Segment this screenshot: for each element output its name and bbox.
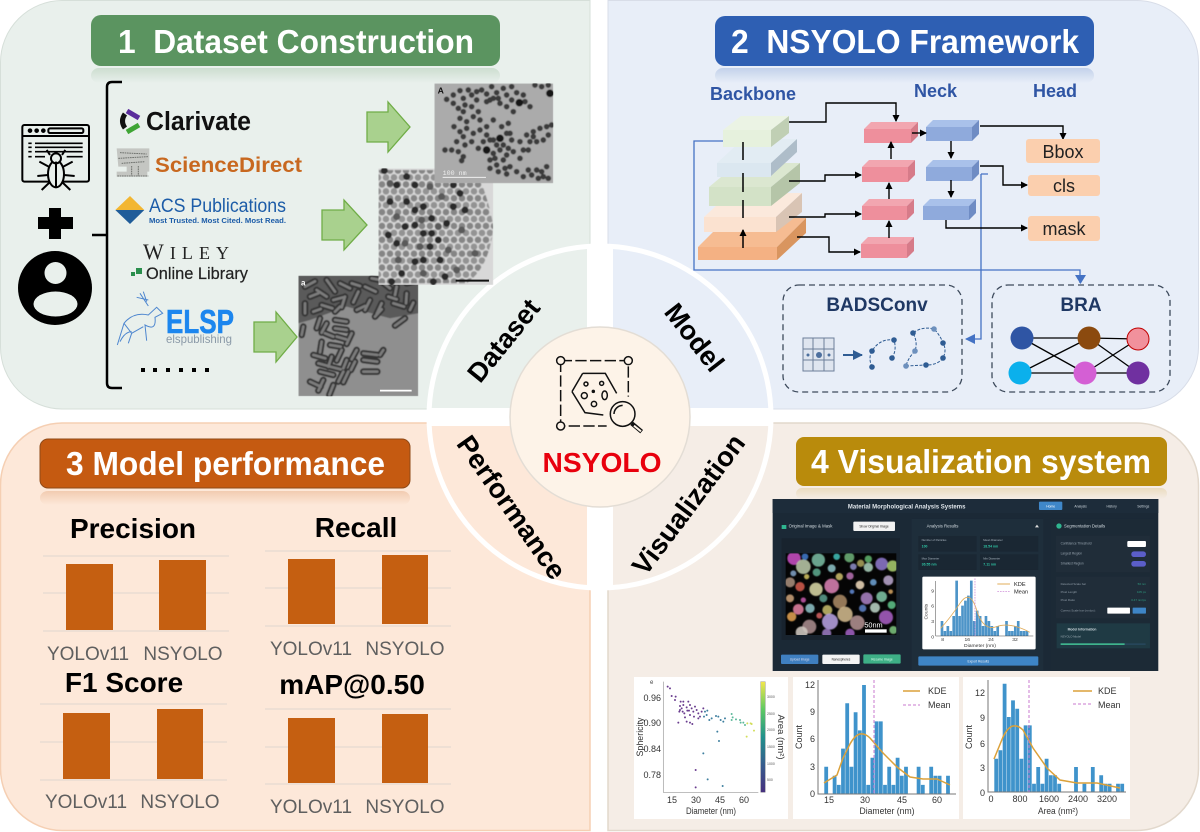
histogram: area: 2400 <box>1068 794 1088 804</box>
scatter plot: sphericity vs diameter: Sphericity <box>635 717 645 756</box>
dashboard screenshot: Material Morphological Analysis Systems <box>848 504 966 510</box>
central cross gap <box>432 248 768 586</box>
dashboard screenshot: Upload Image <box>790 658 810 662</box>
bracket <box>92 82 122 388</box>
histogram: diameter: 45 <box>897 795 907 805</box>
histogram: diameter: 60 <box>932 795 942 805</box>
dashboard screenshot: 105 px <box>1137 590 1146 594</box>
dashboard screenshot: Segmentation Details <box>1064 524 1105 529</box>
scatter plot: sphericity vs diameter: e <box>650 680 654 686</box>
dashboard screenshot: Pixel Ratio <box>1061 598 1075 602</box>
bar chart: Precision: YOLOv11 <box>47 644 129 665</box>
histogram: area: KDE <box>1098 686 1117 696</box>
scatter plot: sphericity vs diameter <box>634 677 788 819</box>
scatter plot: sphericity vs diameter: 2000 <box>767 728 775 732</box>
dashboard screenshot: 24 <box>988 637 994 643</box>
logo: ACS Publications: ACS Publications <box>149 196 286 217</box>
histogram: diameter: 30 <box>860 795 870 805</box>
dashboard screenshot: History <box>1106 504 1117 508</box>
dashboard screenshot: 16 <box>965 637 970 643</box>
panel: dataset background <box>0 0 590 409</box>
logo: ScienceDirect: ScienceDirect <box>155 153 302 177</box>
ring label: Visualization: Visualization <box>626 428 751 581</box>
bar chart: F1 Score <box>40 667 227 813</box>
histogram: area: 800 <box>1012 794 1028 804</box>
dashboard screenshot: 0 <box>931 634 934 640</box>
histogram: area: 3 <box>980 763 985 773</box>
histogram: diameter: 6 <box>810 734 815 744</box>
scatter plot: sphericity vs diameter: Diameter (nm) <box>686 806 736 816</box>
dashboard screenshot: Smallest Region <box>1061 561 1084 565</box>
histogram: area: 0 <box>988 794 994 804</box>
heading: visualization system: 4 Visualization system <box>811 443 1151 480</box>
dashboard screenshot: Model Information <box>1068 628 1096 632</box>
micrograph: nanoparticle chains: 100 nm <box>443 169 467 177</box>
dashboard screenshot: 18.54 nm <box>983 544 998 548</box>
neck blocks: red <box>861 122 918 258</box>
icon: plus <box>38 208 73 239</box>
scatter plot: sphericity vs diameter: 3000 <box>767 695 775 699</box>
module: BRA: BRA <box>1060 295 1102 316</box>
scatter plot: sphericity vs diameter: 15 <box>667 795 677 805</box>
dashboard screenshot: Nanospheres <box>832 658 851 662</box>
icon: detection box with magnifier <box>557 357 642 432</box>
heading: visualization system <box>796 437 1167 499</box>
panel: model performance <box>40 439 451 818</box>
logo: ScienceDirect <box>117 148 302 177</box>
panel: performance background <box>0 423 590 830</box>
logo: ELSP: ELSP <box>166 303 234 340</box>
histogram: area: Mean <box>1098 700 1121 710</box>
dashboard screenshot: Max Diameter <box>922 557 939 561</box>
head box: mask: mask <box>1042 219 1086 239</box>
bar chart: Recall <box>265 512 451 660</box>
bar chart: Recall: Recall <box>315 512 397 543</box>
histogram: diameter: Mean <box>928 700 951 710</box>
panel: visualization system <box>634 437 1167 819</box>
dashboard screenshot: Number of Particles <box>922 538 947 542</box>
dashboard screenshot: Confidence Threshold <box>1061 542 1092 546</box>
head box: mask <box>1028 216 1100 241</box>
bar chart: Recall: YOLOv11 <box>270 639 352 660</box>
histogram: area: 3200 <box>1097 794 1117 804</box>
heading: dataset construction: 1 Dataset Construction <box>118 23 474 60</box>
connectors: black arrows <box>789 103 1063 252</box>
bar chart: Precision <box>43 513 229 665</box>
module: BADSConv: BADSConv <box>826 295 928 316</box>
dashboard screenshot: Analysis Results <box>927 524 958 529</box>
histogram: area: 0 <box>980 788 985 798</box>
bar chart: Precision: Precision <box>70 513 196 544</box>
arrow: middle micrograph <box>322 200 367 250</box>
central ring <box>429 246 771 588</box>
dashboard screenshot <box>773 499 1158 671</box>
heading: model performance: 3 Model performance <box>66 445 385 482</box>
scatter plot: sphericity vs diameter: 500 <box>767 778 773 782</box>
arrow: bottom micrograph <box>254 312 297 362</box>
micrograph: nanorods: a <box>301 278 306 287</box>
panel: NSYOLO framework <box>694 16 1170 392</box>
histogram: area: 1600 <box>1039 794 1059 804</box>
label: Head: Head <box>1033 81 1077 101</box>
dashboard screenshot: Resume Image <box>871 657 893 661</box>
scatter plot: sphericity vs diameter: 30 <box>691 795 701 805</box>
module: BADSConv <box>783 285 962 392</box>
ring label: Dataset: Dataset <box>461 293 546 388</box>
logo: Clarivate: Clarivate <box>146 108 251 136</box>
heading: NSYOLO framework: 2 NSYOLO Framework <box>731 23 1080 60</box>
histogram: area: 12 <box>975 688 985 698</box>
logo: ACS Publications <box>115 196 286 225</box>
histogram: area: Count <box>964 724 974 749</box>
scatter plot: sphericity vs diameter: Area (nm²) <box>776 714 786 760</box>
heading: NSYOLO framework <box>715 16 1094 83</box>
dashboard screenshot: Analysis <box>1074 504 1087 508</box>
bar chart: F1 Score: YOLOv11 <box>45 792 127 813</box>
ring label: Performance: Performance <box>451 430 573 585</box>
histogram: diameter: Diameter (nm) <box>860 806 914 816</box>
label: Backbone: Backbone <box>710 84 796 104</box>
logo: Wiley Online Library: Online Library <box>146 265 249 283</box>
histogram: area <box>963 677 1130 819</box>
dashboard screenshot: 50 nm <box>1138 582 1146 586</box>
dashboard screenshot: Detected Scale bar <box>1061 582 1086 586</box>
micrograph: nanoparticle chains <box>434 83 553 183</box>
dashboard screenshot: Show Original Image <box>859 525 889 529</box>
micrograph: nanorods <box>298 276 418 396</box>
arrow: top micrograph <box>367 102 410 152</box>
panel: framework background <box>608 0 1198 409</box>
dashboard screenshot: 50nm <box>864 621 883 630</box>
center circle <box>510 327 690 507</box>
bar chart: mAP@0.50: YOLOv11 <box>270 797 352 818</box>
dashboard screenshot: 36.55 nm <box>922 563 937 567</box>
histogram: diameter: KDE <box>928 686 947 696</box>
dashboard screenshot: Settings <box>1137 504 1150 508</box>
neck blocks: blue <box>923 120 979 220</box>
arrowheads: blue <box>965 275 1086 344</box>
icon: user <box>18 251 92 325</box>
scatter plot: sphericity vs diameter: 1000 <box>767 762 775 766</box>
histogram: diameter: Count <box>794 724 804 749</box>
scatter plot: sphericity vs diameter: 45 <box>715 795 725 805</box>
dashboard screenshot: 6 <box>931 604 934 610</box>
heading: model performance <box>40 439 410 505</box>
dashboard screenshot: KDE <box>1014 582 1026 588</box>
bar chart: F1 Score: F1 Score <box>65 667 183 698</box>
ring label: Model: Model <box>658 298 730 378</box>
histogram: diameter: 12 <box>805 680 815 690</box>
label: Neck: Neck <box>914 81 958 101</box>
head box: Bbox: Bbox <box>1042 142 1084 162</box>
dashboard screenshot: 100 <box>922 544 928 548</box>
scatter plot: sphericity vs diameter: 1500 <box>767 745 775 749</box>
histogram: area: 9 <box>980 713 985 723</box>
dashboard screenshot: Export Results <box>967 659 989 663</box>
dashboard screenshot: Mean <box>1014 589 1028 595</box>
logo: ACS Publications: Most Trusted. Most Cited. Most Read. <box>149 216 286 225</box>
bar chart: mAP@0.50: NSYOLO <box>365 797 445 818</box>
dashboard screenshot: Mean Diameter <box>983 538 1003 542</box>
histogram: diameter: 9 <box>810 707 815 717</box>
scatter plot: sphericity vs diameter: 0.96 <box>643 693 661 703</box>
scatter plot: sphericity vs diameter: 0.78 <box>643 770 661 780</box>
bar chart: Precision: NSYOLO <box>143 644 223 665</box>
head box: cls <box>1028 175 1100 196</box>
dashboard screenshot: Home <box>1046 504 1055 508</box>
micrograph: nanoparticle chains: A <box>438 85 445 95</box>
histogram: area: 6 <box>980 739 985 749</box>
dashboard screenshot: Counts <box>924 603 930 620</box>
scatter plot: sphericity vs diameter: 0.90 <box>643 718 661 728</box>
logo: Wiley Online Library: W ILEY <box>143 239 229 264</box>
dashboard screenshot: Original Image & Mask <box>789 524 833 529</box>
logo: ELSP: elspublishing <box>166 332 232 346</box>
dashboard screenshot: 3 <box>931 619 934 625</box>
dashboard screenshot: Pixel Length <box>1061 590 1077 594</box>
dashboard screenshot: Correct Scale bar (nm/px): <box>1061 609 1096 613</box>
bar chart: mAP@0.50 <box>265 669 451 818</box>
dashboard screenshot: Diameter (nm) <box>964 643 996 649</box>
icon: web crawler <box>22 125 89 190</box>
module: BRA <box>992 285 1170 392</box>
dashboard screenshot: 8 <box>941 637 944 643</box>
panel: visualization background <box>608 423 1198 831</box>
histogram: diameter <box>793 677 959 819</box>
dashboard screenshot: NSYOLO Model <box>1061 635 1081 639</box>
bar chart: mAP@0.50: mAP@0.50 <box>279 669 425 700</box>
histogram: diameter: 3 <box>810 762 815 772</box>
logo: ELSP <box>117 292 234 346</box>
head box: cls: cls <box>1053 176 1075 196</box>
dashboard screenshot: 0.47 nm/px <box>1131 598 1146 602</box>
bar chart: F1 Score: NSYOLO <box>140 792 220 813</box>
dashboard screenshot: 9 <box>931 588 934 594</box>
head box: Bbox <box>1026 139 1100 163</box>
histogram: diameter: 0 <box>810 789 815 799</box>
ellipsis dots <box>141 368 209 372</box>
connector: backbone feedback lines <box>694 141 1080 339</box>
dashboard screenshot: 32 <box>1012 637 1018 643</box>
panel: dataset construction <box>18 15 553 396</box>
histogram: diameter: 15 <box>824 795 834 805</box>
scatter plot: sphericity vs diameter: 2500 <box>767 712 775 716</box>
scatter plot: sphericity vs diameter: 60 <box>739 795 749 805</box>
heading: dataset construction <box>91 15 500 83</box>
bar chart: Recall: NSYOLO <box>365 639 445 660</box>
dashboard screenshot: 7.11 nm <box>983 563 996 567</box>
logo: Wiley Online Library <box>131 239 249 283</box>
dashboard screenshot: Min Diameter <box>983 557 1000 561</box>
micrograph: nanospheres <box>378 168 493 285</box>
dashboard screenshot: Largest Region <box>1061 552 1082 556</box>
histogram: area: Area (nm²) <box>1038 806 1078 816</box>
scatter plot: sphericity vs diameter: 0.84 <box>643 744 661 754</box>
center label: NSYOLO <box>542 447 662 478</box>
backbone stack <box>698 116 806 260</box>
